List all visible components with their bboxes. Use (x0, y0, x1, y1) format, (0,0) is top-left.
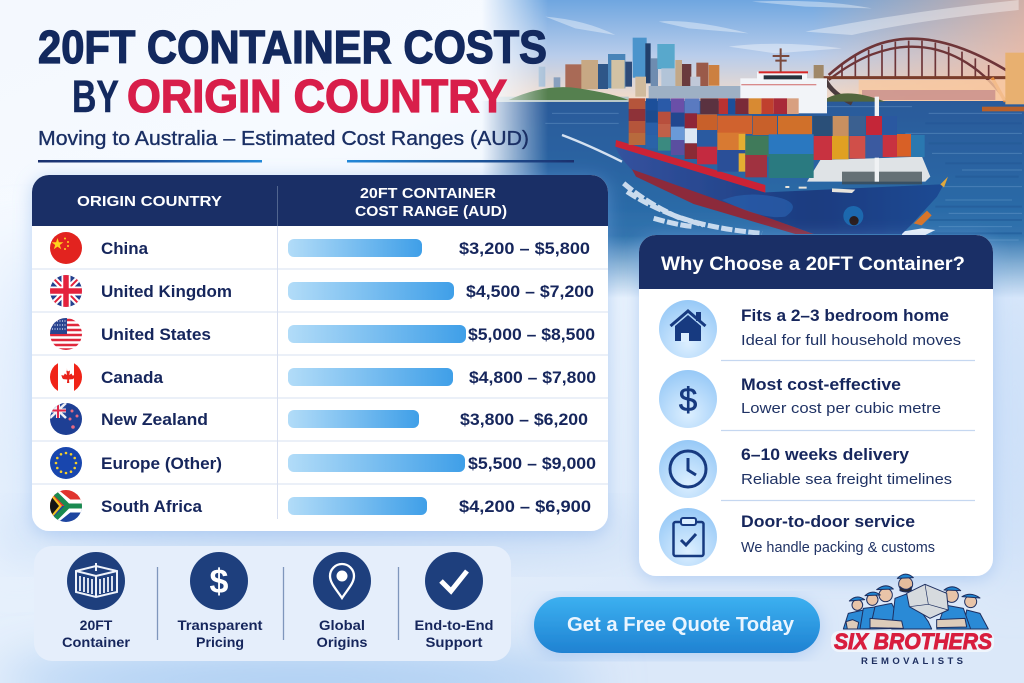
row: Europe (Other): $5,500 – $9,000 (468, 454, 596, 473)
table header: ORIGIN COUNTRY (77, 193, 222, 210)
panel: benefits strip (34, 546, 511, 661)
row: South Africa (50, 490, 591, 522)
row: United States (50, 318, 595, 350)
row: China: $3,200 – $5,800 (459, 239, 590, 258)
hull (615, 97, 948, 234)
logo: six brothers removalists (831, 574, 994, 667)
row: New Zealand: New Zealand (101, 410, 208, 429)
benefit: global origins: Global (319, 617, 365, 633)
row: United Kingdom (50, 275, 594, 307)
water (482, 101, 1024, 301)
row: Canada (50, 363, 596, 391)
table header: COST RANGE (AUD) (355, 204, 507, 220)
row: New Zealand (50, 403, 588, 435)
benefit: 20ft container (62, 552, 131, 650)
benefit: transparent pricing: Transparent (178, 617, 263, 633)
row: United States: United States (101, 325, 211, 344)
sky (482, 0, 1024, 102)
row: United Kingdom: United Kingdom (101, 282, 232, 301)
row: South Africa: $4,200 – $6,900 (459, 497, 591, 516)
benefit: end-to-end support: End-to-End (414, 617, 494, 633)
feature: delivery time (659, 440, 952, 498)
city skyline (495, 38, 749, 102)
feature: cost-effective (659, 370, 941, 428)
feature: door-to-door: Door-to-door service (741, 513, 915, 531)
table header (32, 175, 608, 226)
row: China (50, 232, 590, 264)
benefit: 20ft container: 20FT (80, 617, 113, 633)
title (38, 21, 547, 122)
title: BY (72, 71, 119, 122)
subtitle: Moving to Australia – Estimated Cost Ranges (AUD) (38, 127, 529, 150)
feature: bedroom home (659, 300, 961, 358)
wake (562, 135, 622, 162)
title: ORIGIN COUNTRY (127, 70, 507, 122)
benefit: global origins: Origins (316, 634, 368, 650)
row: New Zealand: $3,800 – $6,200 (460, 410, 588, 429)
row: Europe (Other): Europe (Other) (101, 454, 222, 473)
containers (629, 98, 925, 178)
feature: delivery time: Reliable sea freight timelines (741, 471, 952, 488)
row: Canada: Canada (101, 368, 164, 387)
row: United States: $5,000 – $8,500 (468, 325, 595, 344)
benefit: 20ft container: Container (62, 634, 131, 650)
benefit: global origins (313, 552, 371, 650)
row: Europe (Other) (50, 447, 596, 479)
feature: door-to-door: We handle packing & customs (741, 539, 935, 556)
title underlines (38, 160, 574, 162)
logo: six brothers removalists: SIX BROTHERS (834, 629, 992, 654)
panel heading: Why Choose a 20FT Container? (661, 253, 965, 275)
feature: cost-effective: Most cost-effective (741, 376, 901, 394)
feature: cost-effective: $ (679, 381, 697, 418)
feature: door-to-door (659, 508, 935, 566)
feature: bedroom home: Fits a 2–3 bedroom home (741, 307, 949, 325)
row: China: China (101, 239, 149, 258)
button: get a free quote (534, 597, 820, 653)
feature: bedroom home: Ideal for full household moves (741, 332, 961, 349)
benefit: end-to-end support (414, 552, 494, 650)
benefit: transparent pricing: $ (210, 563, 229, 601)
logo: six brothers removalists: REMOVALISTS (861, 656, 963, 667)
table header: 20FT CONTAINER (360, 186, 497, 202)
panel: why choose a 20ft container (639, 235, 993, 576)
row: United Kingdom: $4,500 – $7,200 (466, 282, 594, 301)
row: Canada: $4,800 – $7,800 (469, 368, 596, 387)
benefit: transparent pricing: Pricing (196, 634, 244, 650)
feature: cost-effective: Lower cost per cubic metre (741, 400, 941, 417)
harbour bridge (819, 39, 1009, 103)
panel heading (639, 235, 993, 289)
panel: cost table (32, 175, 608, 531)
logo figures (843, 574, 988, 629)
photo: ship in Sydney harbour (482, 0, 1024, 301)
row: South Africa: South Africa (101, 497, 203, 516)
title: 20FT CONTAINER COSTS (38, 21, 547, 73)
benefit: transparent pricing (178, 552, 263, 650)
benefit: end-to-end support: Support (426, 634, 483, 650)
button: get a free quote: Get a Free Quote Today (567, 614, 795, 636)
ship superstructure (740, 48, 827, 113)
feature: delivery time: 6–10 weeks delivery (741, 446, 910, 464)
